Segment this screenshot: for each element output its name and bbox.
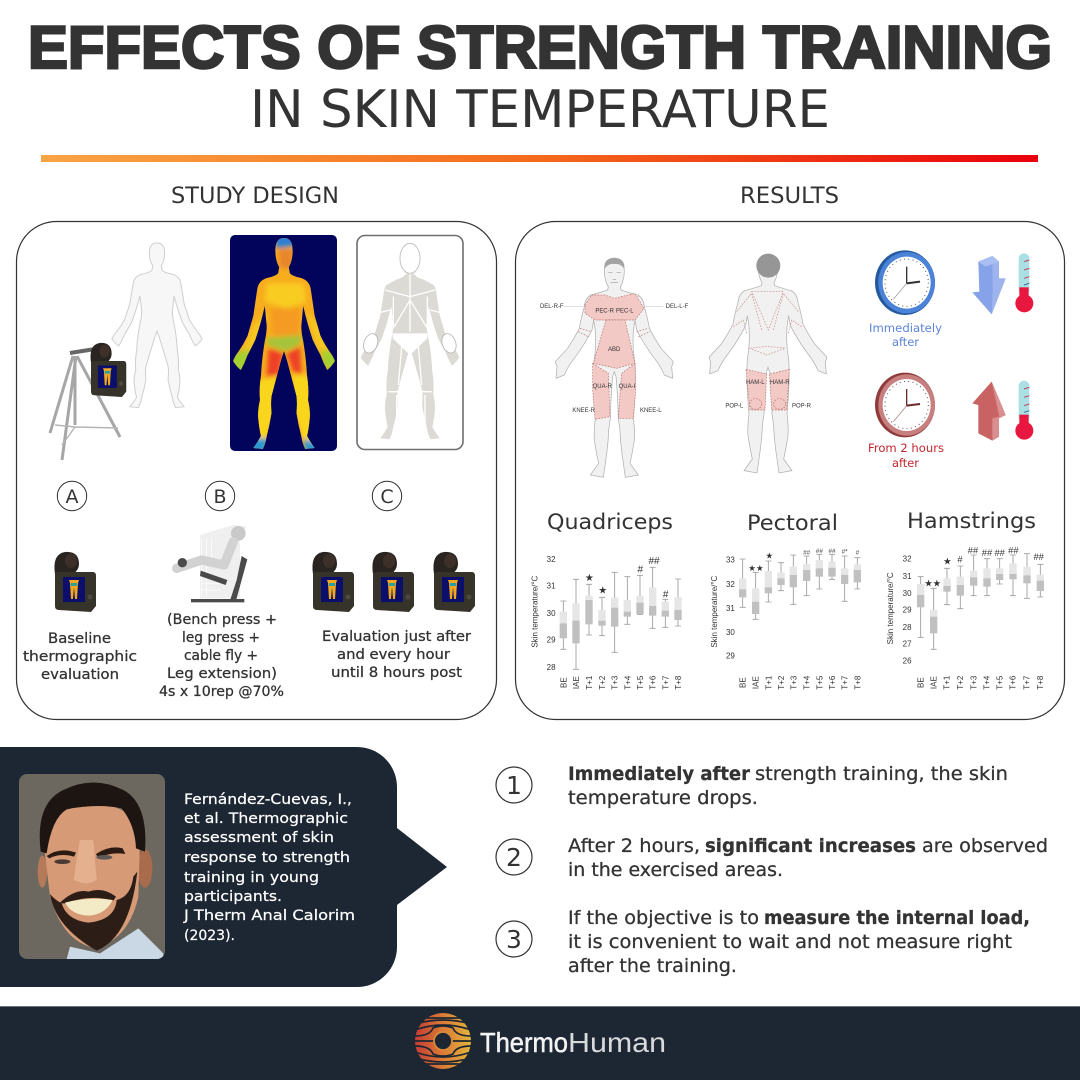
citation text: assessment of skin [184, 829, 334, 846]
text: post evaluation: and every hour [337, 647, 450, 663]
anatomy back view: POP-L [725, 403, 744, 409]
box plot: pectoral: Skin temperature/°C [710, 575, 719, 648]
takeaway 2 [568, 835, 1048, 881]
icon: leg extension machine [177, 525, 247, 602]
text: baseline evaluation: thermographic [23, 649, 137, 665]
box plot: hamstrings: 26 [903, 657, 912, 666]
box plot: pectoral: ## [816, 548, 823, 555]
box plot: pectoral: ★★ [748, 563, 764, 573]
icon: camera C2 [372, 552, 414, 612]
anatomy back view: POP-R [792, 403, 812, 409]
box plot: quadriceps: IAE [572, 676, 581, 689]
panel: study design [16, 222, 496, 720]
box plot: hamstrings: Skin temperature/°C [886, 572, 895, 644]
icon: blue clock [875, 250, 935, 315]
icon: red up arrow [972, 382, 1006, 441]
box plot: hamstrings: 28 [903, 623, 912, 632]
takeaway 3: it is convenient to wait and not measure right [568, 931, 1012, 953]
text: exercise protocol: leg press + [182, 630, 260, 646]
label: from 2 hours after: after [892, 456, 919, 470]
box plot: quadriceps: 29 [547, 636, 556, 645]
citation text: response to strength [184, 849, 350, 866]
segmented body map [357, 236, 463, 450]
step B marker [205, 481, 235, 511]
box plot: pectoral [710, 548, 862, 690]
box plot: hamstrings: 29 [903, 606, 912, 615]
chart title: hamstrings: Hamstrings [907, 509, 1036, 534]
citation text: J Therm Anal Calorim [183, 907, 355, 924]
step A marker [57, 481, 87, 511]
gradient divider bar [41, 155, 1038, 162]
number 3 [496, 921, 532, 957]
box plot: quadriceps: T+3 [611, 675, 620, 690]
box plot: pectoral: 33 [726, 556, 735, 565]
box plot: quadriceps: T+7 [661, 675, 670, 690]
box plot: pectoral: T+3 [789, 675, 798, 690]
label: from 2 hours after: From 2 hours [868, 441, 944, 455]
box plot: pectoral: ## [828, 548, 836, 555]
anatomy front view: QUA-R [593, 384, 613, 390]
step B marker: B [213, 486, 227, 508]
step C marker [372, 481, 402, 511]
box plot: quadriceps: T+2 [598, 675, 607, 690]
anatomy front view: ABD [608, 347, 621, 353]
box plot: hamstrings [886, 545, 1045, 690]
number 2 [496, 839, 532, 875]
box plot: hamstrings: T+8 [1036, 675, 1045, 690]
anatomy front view [540, 258, 689, 477]
anatomy back view: HAM-L [746, 380, 765, 386]
icon: ghost human figure [112, 243, 202, 408]
logo wordmark: Human [568, 1027, 666, 1058]
box plot: hamstrings: ## [982, 548, 993, 558]
box plot: quadriceps: T+4 [623, 675, 632, 690]
title: IN SKIN TEMPERATURE [250, 80, 830, 140]
step C marker: C [380, 486, 394, 508]
box plot: quadriceps: ★ [598, 585, 607, 596]
box plot: pectoral: 32 [726, 580, 735, 589]
box plot: pectoral: 29 [726, 652, 735, 661]
text: exercise protocol [159, 612, 284, 700]
box plot: hamstrings: T+3 [969, 675, 978, 690]
citation text: (2023). [184, 927, 235, 944]
anatomy front view: PEC-L [616, 308, 634, 314]
takeaway 2: significant increases [705, 835, 916, 857]
box plot: pectoral: 31 [726, 604, 735, 613]
box plot: hamstrings: T+7 [1023, 675, 1032, 690]
takeaway 1: Immediately after [568, 763, 751, 785]
box plot: hamstrings: ## [1008, 545, 1019, 555]
label: from 2 hours after [868, 441, 944, 470]
box plot: quadriceps: Skin temperature/°C [530, 575, 539, 648]
title [28, 14, 1052, 140]
box plot: quadriceps: T+6 [649, 675, 658, 690]
box plot: hamstrings: ## [994, 548, 1006, 558]
anatomy front view: KNEE-L [640, 408, 662, 414]
author speech bubble [0, 747, 447, 987]
box plot: quadriceps: # [638, 564, 644, 575]
heading: study design: STUDY DESIGN [171, 184, 339, 209]
text: post evaluation [322, 629, 471, 681]
takeaway 3 [568, 907, 1030, 977]
anatomy front view: KNEE-R [572, 408, 596, 414]
panel: results [516, 222, 1064, 720]
anatomy front view: QUA-I [619, 384, 636, 390]
takeaway 1: temperature drops. [568, 787, 758, 809]
icon: thermometer hot [1015, 381, 1033, 440]
text: baseline evaluation [23, 631, 137, 683]
takeaway 1 [568, 763, 1008, 809]
citation text [183, 791, 355, 944]
box plot: hamstrings: # [957, 554, 963, 564]
text: exercise protocol: Leg extension) [167, 666, 277, 682]
box plot: hamstrings: ## [968, 545, 979, 555]
label: immediately after: Immediately [869, 321, 942, 335]
box plot: quadriceps: T+1 [585, 675, 594, 690]
box plot: hamstrings: T+1 [943, 675, 952, 690]
anatomy front view: DEL-L-F [666, 304, 689, 310]
box plot: quadriceps: ## [648, 556, 660, 567]
takeaway 3: measure the internal load, [764, 907, 1030, 929]
box plot: hamstrings: IAE [929, 676, 938, 689]
anatomy front view: DEL-R-F [540, 304, 564, 310]
box plot: pectoral: T+5 [815, 675, 824, 690]
box plot: pectoral: #* [842, 549, 848, 556]
box plot: quadriceps: T+8 [674, 675, 683, 690]
box plot: hamstrings: T+6 [1009, 675, 1018, 690]
citation text: et al. Thermographic [184, 810, 348, 827]
icon: camera C1 [312, 552, 354, 612]
text: baseline evaluation: evaluation [41, 667, 119, 683]
icon: camera baseline [54, 552, 96, 612]
citation text: participants. [184, 888, 282, 905]
thermal image [230, 235, 338, 452]
box plot: pectoral: T+7 [841, 675, 850, 690]
box plot: hamstrings: ★ [943, 557, 952, 567]
box plot: hamstrings: T+4 [983, 675, 992, 690]
chart title: pectoral: Pectoral [747, 511, 838, 536]
box plot: hamstrings: 30 [903, 589, 912, 598]
box plot: pectoral: ★ [765, 550, 773, 560]
icon: thermometer cold [1015, 253, 1033, 312]
box plot: pectoral: T+2 [777, 675, 786, 690]
box plot: quadriceps: 30 [547, 609, 556, 618]
text: post evaluation: Evaluation just after [322, 629, 471, 645]
text: exercise protocol: 4s x 10rep @70% [159, 684, 284, 700]
box plot: pectoral: 30 [726, 628, 735, 637]
takeaway 1: strength training, the skin [755, 763, 1008, 785]
icon: camera on tripod [50, 343, 126, 460]
box plot: pectoral: IAE [752, 676, 761, 689]
box plot: quadriceps: 32 [547, 555, 556, 564]
box plot: hamstrings: 32 [903, 555, 912, 564]
label: immediately after [869, 321, 942, 349]
anatomy front view: PEC-R [595, 308, 615, 314]
box plot: pectoral: T+8 [853, 675, 862, 690]
icon: camera C3 [433, 552, 475, 612]
takeaway 2: After 2 hours, [568, 835, 700, 857]
heading: results: RESULTS [740, 184, 839, 209]
text: exercise protocol: (Bench press + [167, 612, 277, 628]
box plot: quadriceps: 28 [547, 663, 556, 672]
logo wordmark [480, 1027, 666, 1058]
number 2: 2 [506, 843, 522, 872]
box plot: pectoral: T+4 [803, 675, 812, 690]
box plot: hamstrings: T+5 [995, 675, 1004, 690]
box plot: quadriceps: BE [559, 677, 568, 688]
icon: blue down arrow [972, 256, 1006, 314]
step A marker: A [66, 486, 78, 508]
number 1: 1 [506, 771, 522, 800]
anatomy back view [709, 254, 827, 473]
number 1 [496, 767, 532, 803]
box plot: hamstrings: 31 [903, 572, 912, 581]
box plot: quadriceps [530, 555, 683, 690]
box plot: pectoral: BE [739, 677, 748, 688]
box plot: quadriceps: ★ [585, 573, 594, 584]
box plot: pectoral: ## [803, 550, 811, 557]
chart title: quadriceps: Quadriceps [547, 510, 673, 535]
anatomy back view: HAM-R [770, 380, 790, 386]
label: immediately after: after [892, 335, 919, 349]
text: post evaluation: until 8 hours post [331, 665, 462, 681]
box plot: hamstrings: BE [916, 677, 925, 688]
logo mark [415, 1013, 471, 1069]
box plot: quadriceps: # [663, 589, 669, 600]
citation text: training in young [184, 869, 319, 886]
box plot: quadriceps: T+5 [636, 675, 645, 690]
icon: red clock [875, 373, 935, 437]
takeaway 2: are observed [922, 835, 1048, 857]
box plot: quadriceps: 31 [547, 582, 556, 591]
box plot: hamstrings: T+2 [956, 675, 965, 690]
takeaway 2: in the exercised areas. [568, 859, 783, 881]
box plot: pectoral: T+1 [764, 675, 773, 690]
box plot: pectoral: T+6 [828, 675, 837, 690]
box plot: hamstrings: 27 [903, 640, 912, 649]
title: EFFECTS OF STRENGTH TRAINING [28, 14, 1052, 81]
text: baseline evaluation: Baseline [48, 631, 111, 647]
takeaway 3: after the training. [568, 955, 737, 977]
citation text: Fernández-Cuevas, I., [184, 791, 352, 808]
author portrait [19, 774, 165, 959]
footer band [0, 1006, 1080, 1080]
takeaway 3: If the objective is to [568, 907, 759, 929]
box plot: hamstrings: ## [1033, 552, 1045, 562]
number 3: 3 [506, 925, 522, 954]
box plot: hamstrings: ★★ [924, 579, 941, 589]
logo wordmark: Thermo [480, 1027, 568, 1058]
text: exercise protocol: cable fly + [184, 648, 258, 664]
box plot: pectoral: # [856, 549, 860, 556]
